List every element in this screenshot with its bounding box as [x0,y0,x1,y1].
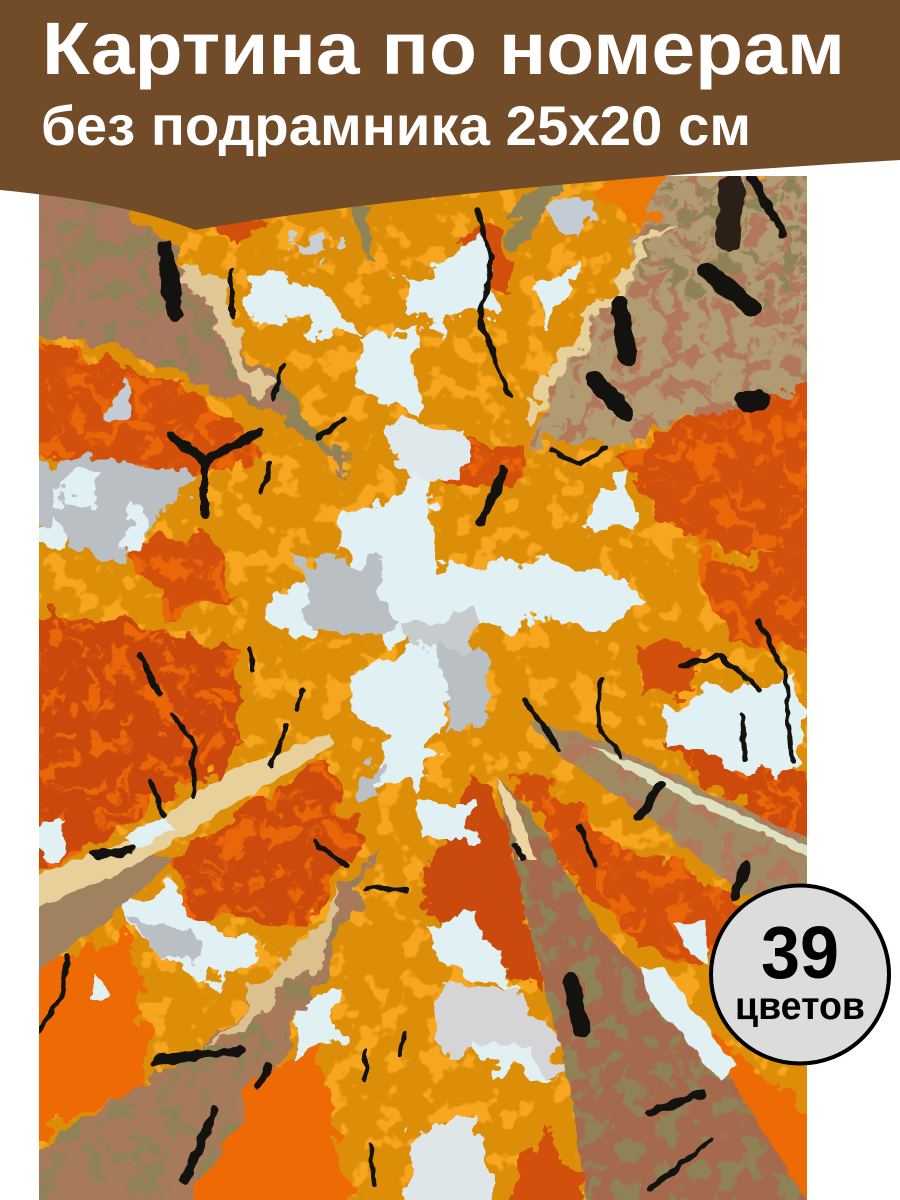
badge label: цветов [735,985,865,1028]
trunk: lower right birch [495,775,815,1200]
sky: pale gaps between the leaves [20,180,805,1200]
trunk: lower left birch [20,850,372,1200]
trunk: long diagonal birch lower left [39,734,334,974]
trunk: right birch [530,722,830,895]
trunk: upper right birch [522,170,830,445]
badge number: 39 [761,911,839,994]
branches and dark bark marks [40,178,792,1190]
foliage: orange colour masses [20,176,830,1200]
trunk: upper left birch [20,176,345,470]
banner: brown header ribbon [0,0,900,230]
subtitle: без подрамника 25х20 см [41,94,751,157]
badge: number of colours [711,886,889,1064]
foliage: bright orange mottling over masses [39,335,807,965]
title: Картина по номерам [42,7,845,90]
painting: autumn forest canopy [20,170,830,1200]
foliage: light orange mottling [39,176,807,1200]
